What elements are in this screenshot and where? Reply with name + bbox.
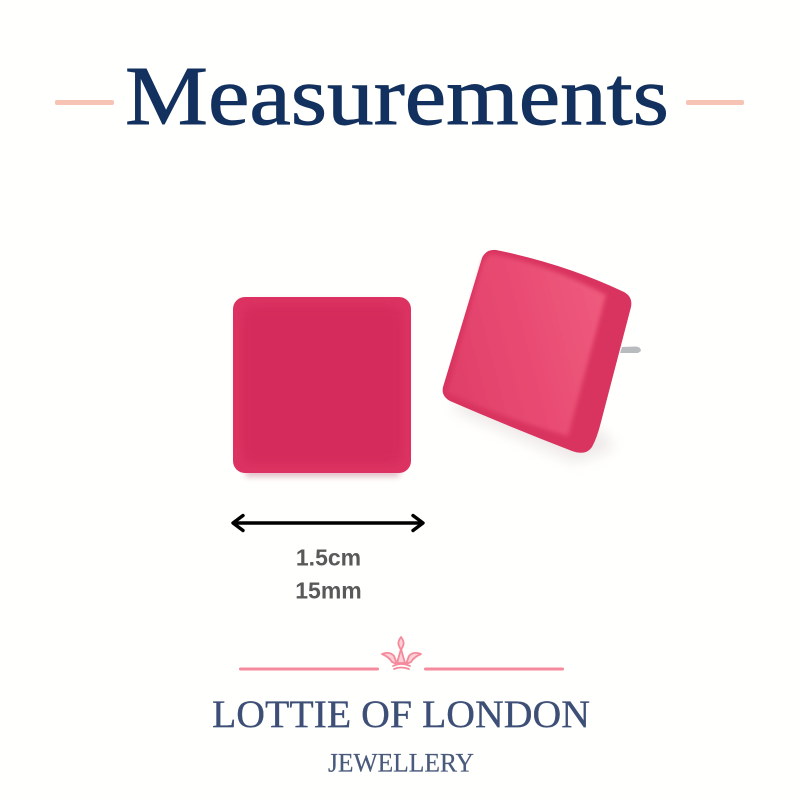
logo rule left <box>239 668 379 670</box>
measurement label: 1.5cm <box>296 544 361 570</box>
heading: Measurements: Measurements <box>125 50 669 143</box>
earring post <box>620 346 641 353</box>
logo rule right <box>424 668 564 670</box>
earring face <box>447 254 606 436</box>
title rule right <box>686 100 744 105</box>
brand logo <box>212 637 590 778</box>
earring body <box>233 297 411 473</box>
right earring <box>443 250 641 462</box>
title group <box>55 50 744 143</box>
measurement label <box>295 544 362 604</box>
title rule left <box>55 100 114 105</box>
earring shadow <box>245 470 400 477</box>
brand subtitle: JEWELLERY <box>328 748 474 778</box>
earring body <box>443 250 631 453</box>
dimension arrow <box>233 516 423 530</box>
earring face <box>242 306 402 464</box>
earring shadow <box>450 395 615 462</box>
measurement label: 15mm <box>295 578 362 604</box>
icon: crown <box>382 637 421 669</box>
left earring <box>233 297 411 477</box>
brand name: LOTTIE OF LONDON <box>212 693 590 736</box>
